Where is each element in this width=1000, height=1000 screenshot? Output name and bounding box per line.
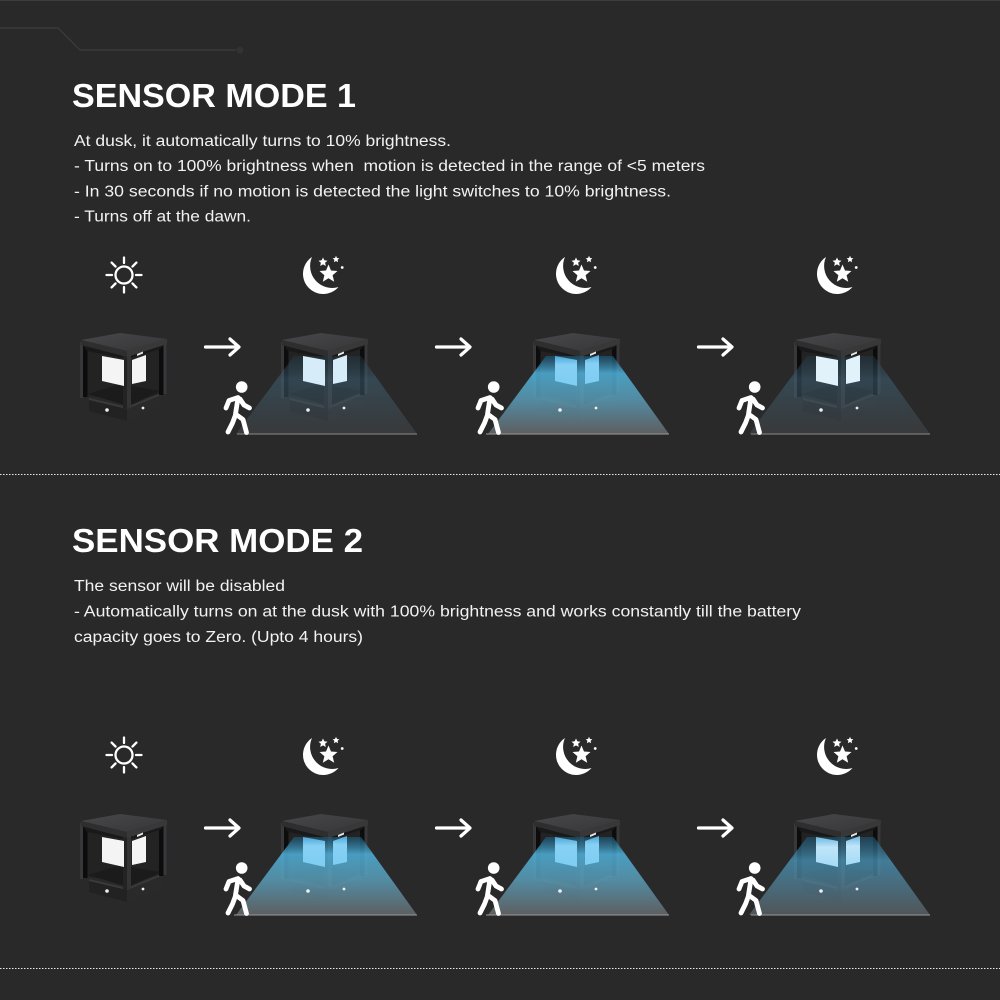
icon: moon and stars 1 — [303, 737, 344, 775]
text block: sensor mode 2 description: capacity goes to Zero. (Upto 4 hours) — [74, 629, 363, 646]
text block: sensor mode 1 description: - Turns on to 100% brightness when motion is detected in the range of <5 meters — [74, 158, 705, 175]
step: lamp at 10% with walker — [236, 333, 417, 434]
icon: sun — [106, 738, 142, 772]
arrow 1 — [206, 820, 239, 836]
diagram row: sensor mode 1 — [80, 256, 930, 434]
lamp: day state — [80, 333, 167, 421]
icon: walker 2 — [478, 862, 502, 914]
icon: moon and stars 3 — [817, 256, 858, 294]
text block: sensor mode 1 description: - In 30 seconds if no motion is detected the light switches to 10% brightness. — [74, 184, 671, 200]
icon: sun — [106, 258, 142, 292]
lamp: day state — [80, 814, 167, 902]
text block: sensor mode 2 description: The sensor will be disabled — [74, 578, 285, 595]
icon: walker 1 — [226, 381, 250, 432]
icon: moon and stars 3 — [817, 737, 858, 775]
text block: sensor mode 1 description: - Turns off at the dawn. — [74, 208, 251, 226]
arrow 3 — [698, 339, 732, 355]
text block: sensor mode 2 description: - Automatically turns on at the dusk with 100% brightness and works constantly till the battery — [74, 604, 801, 620]
icon: walker 2 — [478, 381, 502, 432]
diagram row: sensor mode 2 — [80, 737, 930, 916]
icon: moon and stars 2 — [556, 737, 597, 775]
arrow 2 — [436, 339, 470, 355]
step: lamp at 100% 2 — [486, 814, 669, 916]
arrow 2 — [436, 820, 470, 836]
heading: sensor mode 1: SENSOR MODE 1 — [72, 77, 356, 114]
step: lamp at 100% 3 — [749, 814, 930, 916]
text block: sensor mode 1 description: At dusk, it automatically turns to 10% brightness. — [74, 133, 451, 150]
text block: sensor mode 2 description — [74, 578, 801, 646]
text block: sensor mode 1 description — [74, 133, 705, 226]
icon: moon and stars 1 — [303, 256, 344, 294]
step: lamp back to 10% with walker — [749, 333, 930, 434]
decorative circuit line — [0, 28, 244, 54]
arrow 3 — [698, 820, 732, 836]
icon: walker 1 — [226, 862, 250, 914]
divider — [0, 968, 1000, 970]
step: lamp at 100% with walker — [486, 333, 669, 434]
icon: walker 3 — [739, 381, 762, 432]
divider — [0, 474, 1000, 476]
step: lamp at 100% 1 — [234, 814, 417, 916]
icon: walker 3 — [739, 862, 762, 914]
icon: moon and stars 2 — [556, 256, 597, 294]
heading: sensor mode 2: SENSOR MODE 2 — [72, 522, 363, 559]
arrow 1 — [206, 339, 239, 355]
